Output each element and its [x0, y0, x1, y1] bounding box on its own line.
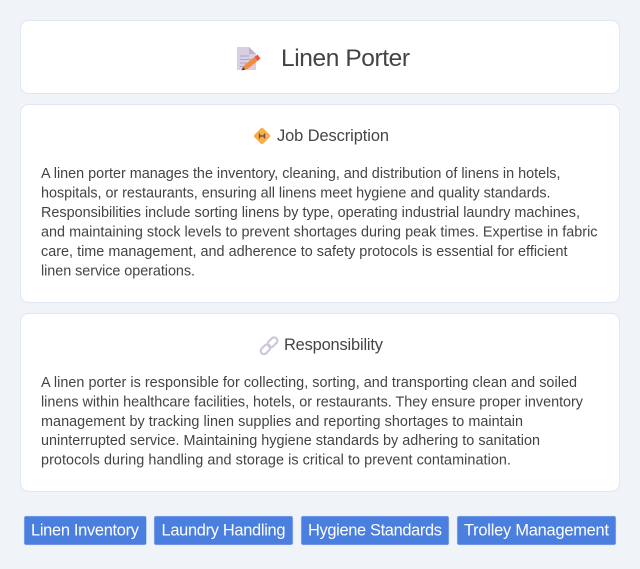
- text block: job description: Responsibilities include sorting linens by type, operating industrial laundry machines,: [41, 205, 580, 221]
- text block: job description: linen service operations.: [41, 264, 195, 280]
- text block: job description: A linen porter manages the inventory, cleaning, and distribution of linens in hotels,: [41, 166, 560, 182]
- tag: Laundry Handling: Laundry Handling: [162, 522, 286, 540]
- heading: Linen Porter: Linen Porter: [281, 45, 410, 72]
- text block: job description: [41, 166, 598, 280]
- icon: chain link: [259, 336, 279, 355]
- text block: responsibility: linens within healthcare facilities, hotels, or restaurants. They ensure proper inventory: [41, 394, 584, 410]
- text block: job description: and maintaining stock levels to prevent shortages during peak times. Expertise in fabric: [41, 224, 598, 240]
- icon: warning diamond: [253, 127, 271, 145]
- text block: job description: hospitals, or restaurants, ensuring all linens meet hygiene and quality standards.: [41, 186, 550, 202]
- heading: Responsibility: Responsibility: [284, 336, 384, 354]
- text block: responsibility: protocols during handling and storage is critical to prevent contamination.: [41, 452, 511, 468]
- panel: title: [20, 20, 620, 94]
- tag: Hygiene Standards: Hygiene Standards: [308, 522, 442, 540]
- text block: responsibility: [41, 375, 584, 468]
- tag: Trolley Management: [457, 516, 616, 545]
- text block: job description: care, time management, and adherence to safety protocols is essential for efficient: [41, 244, 568, 260]
- panel: responsibility: [20, 314, 620, 492]
- heading: Job Description: Job Description: [277, 127, 389, 145]
- text block: responsibility: A linen porter is responsible for collecting, sorting, and transporting clean and soiled: [41, 375, 577, 391]
- tag: Laundry Handling: [154, 516, 293, 545]
- tag: Hygiene Standards: [301, 516, 449, 545]
- text block: responsibility: management by tracking linen supplies and reporting shortages to maintain: [41, 414, 523, 430]
- tag: Linen Inventory: Linen Inventory: [31, 522, 140, 540]
- tag: Trolley Management: Trolley Management: [464, 522, 609, 540]
- text block: responsibility: uninterrupted service. Maintaining hygiene standards by adhering to sanitation: [41, 433, 540, 449]
- tag: Linen Inventory: [24, 516, 146, 545]
- panel: job description: [20, 104, 620, 302]
- icon: document with pencil: [237, 47, 260, 70]
